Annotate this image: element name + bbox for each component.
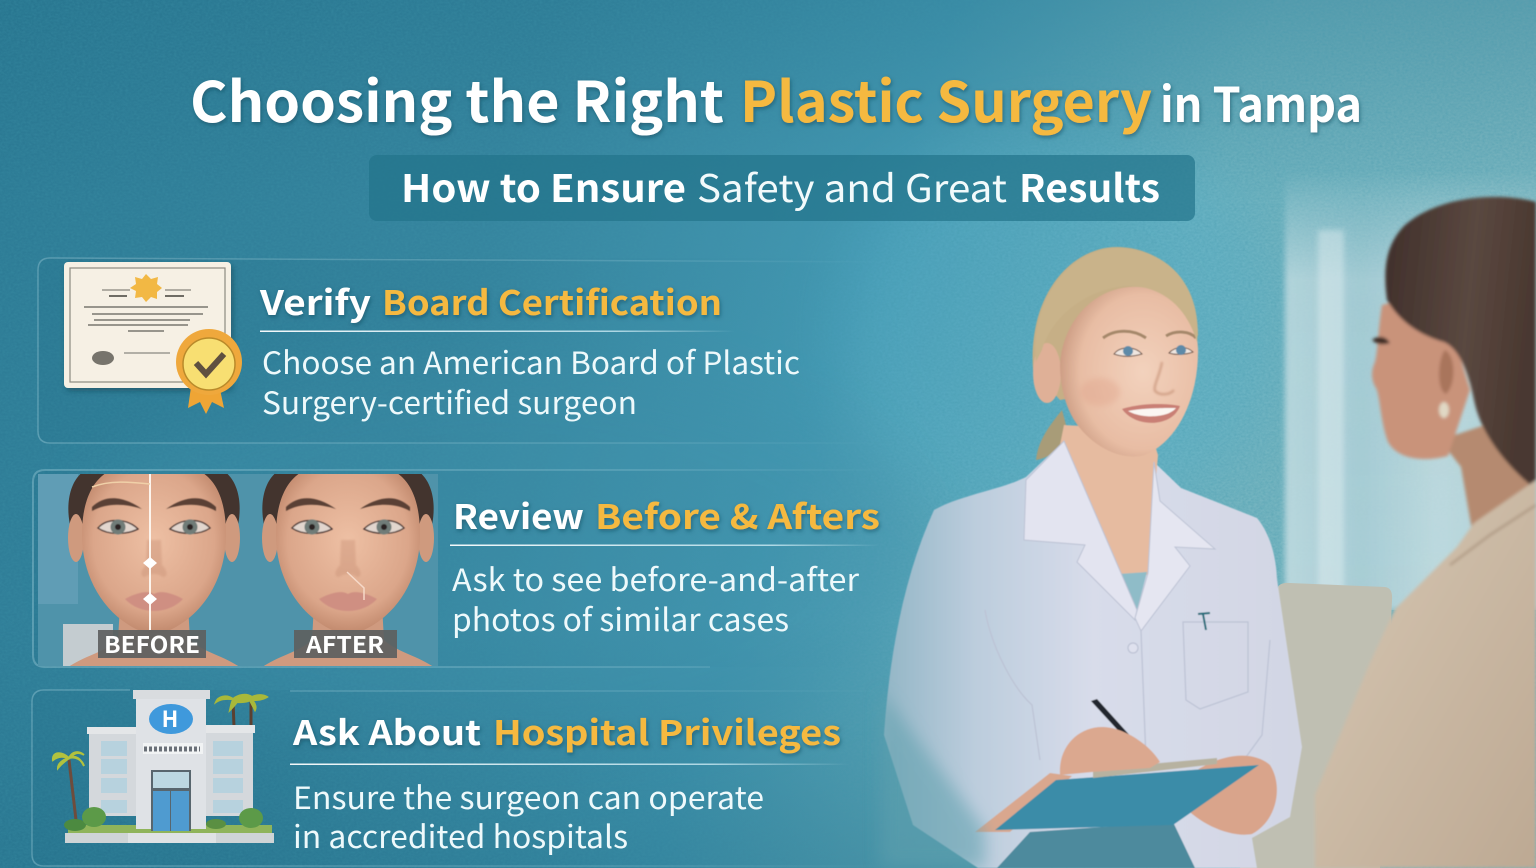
title [190, 58, 1362, 139]
patient neck [1440, 420, 1536, 530]
description [293, 773, 764, 857]
panel frame [33, 470, 890, 667]
hospital sign strip [143, 743, 203, 754]
doctor left lapel [1024, 441, 1137, 620]
patient eye [1372, 337, 1390, 344]
doctor nose [1155, 362, 1174, 394]
doctor eyes [1103, 331, 1196, 356]
doctor forearm [975, 773, 1072, 832]
pocket pen [1198, 613, 1210, 630]
doctor neck [1060, 425, 1158, 575]
palm right [233, 700, 251, 727]
title: in Tampa [1160, 66, 1362, 136]
after markup lines [347, 572, 364, 600]
panel: ask about hospital privileges [32, 690, 890, 866]
title: Plastic Surgery [740, 58, 1152, 139]
clipboard [995, 765, 1259, 830]
before face [68, 474, 240, 666]
description: Ask to see before-and-after [452, 555, 860, 600]
icon: hospital: H [162, 702, 178, 734]
patient jacket [1315, 480, 1536, 868]
writing hand [1060, 727, 1160, 775]
heading [259, 276, 722, 325]
icon: gold seal [176, 329, 242, 414]
shrubs [64, 819, 86, 831]
before label: BEFORE [104, 626, 200, 660]
wings [89, 732, 137, 816]
palm left [69, 760, 76, 820]
description: in accredited hospitals [293, 812, 628, 857]
doctor [880, 247, 1302, 868]
clipboard paper [1093, 758, 1217, 778]
heading [292, 706, 841, 755]
heading: Board Certification [382, 276, 722, 325]
doctor blush [1080, 378, 1120, 406]
patient face [1372, 290, 1470, 459]
doctor right lapel [1135, 462, 1215, 631]
left fade [880, 690, 985, 868]
ground [68, 825, 272, 833]
doctor hair back [1033, 247, 1198, 400]
panel: review before and afters [33, 465, 890, 670]
doctor coat details [985, 610, 1270, 790]
panel frame [32, 690, 890, 866]
patient earring [1439, 402, 1449, 418]
H sign [149, 704, 193, 734]
doctor mouth [1122, 404, 1180, 423]
before after photos [38, 465, 438, 670]
heading: Review [453, 490, 584, 539]
icon: certificate [64, 262, 231, 388]
doctor legs [997, 822, 1195, 868]
after face [262, 474, 434, 666]
panel: verify board certification [38, 258, 890, 443]
description: photos of similar cases [452, 595, 789, 640]
subtitle banner: Safety and Great [697, 158, 1007, 213]
holding hand [1183, 756, 1277, 835]
doctor hair front [1035, 248, 1198, 362]
steps [128, 833, 216, 843]
description [262, 338, 800, 423]
subtitle banner: How to Ensure [401, 158, 686, 213]
tower [136, 699, 206, 829]
patient ear [1439, 350, 1453, 394]
patient [1315, 197, 1536, 868]
description: Ensure the surgeon can operate [293, 773, 764, 818]
heading: Ask About [292, 706, 481, 755]
doctor ear [1033, 343, 1061, 403]
description: Choose an American Board of Plastic [262, 338, 800, 383]
description [452, 555, 860, 640]
icon: hospital [53, 690, 274, 843]
subtitle banner [369, 155, 1195, 221]
pen [1091, 699, 1152, 763]
before markup lines [92, 474, 157, 630]
door [151, 770, 191, 831]
panel frame [38, 258, 890, 443]
heading: Hospital Privileges [493, 706, 841, 755]
doctor ponytail [1036, 410, 1068, 460]
title: Choosing the Right [190, 58, 724, 139]
patient hair [1385, 197, 1536, 490]
after label: AFTER [305, 626, 384, 660]
doctor face [1060, 287, 1198, 457]
heading [453, 490, 880, 539]
description: Surgery-certified surgeon [262, 378, 637, 423]
heading: Verify [259, 276, 372, 325]
room: sofa [1240, 583, 1392, 868]
doctor shirt [1118, 572, 1147, 618]
doctor coat [884, 441, 1302, 868]
heading: Before & Afters [595, 490, 880, 539]
subtitle banner: Results [1019, 158, 1160, 213]
